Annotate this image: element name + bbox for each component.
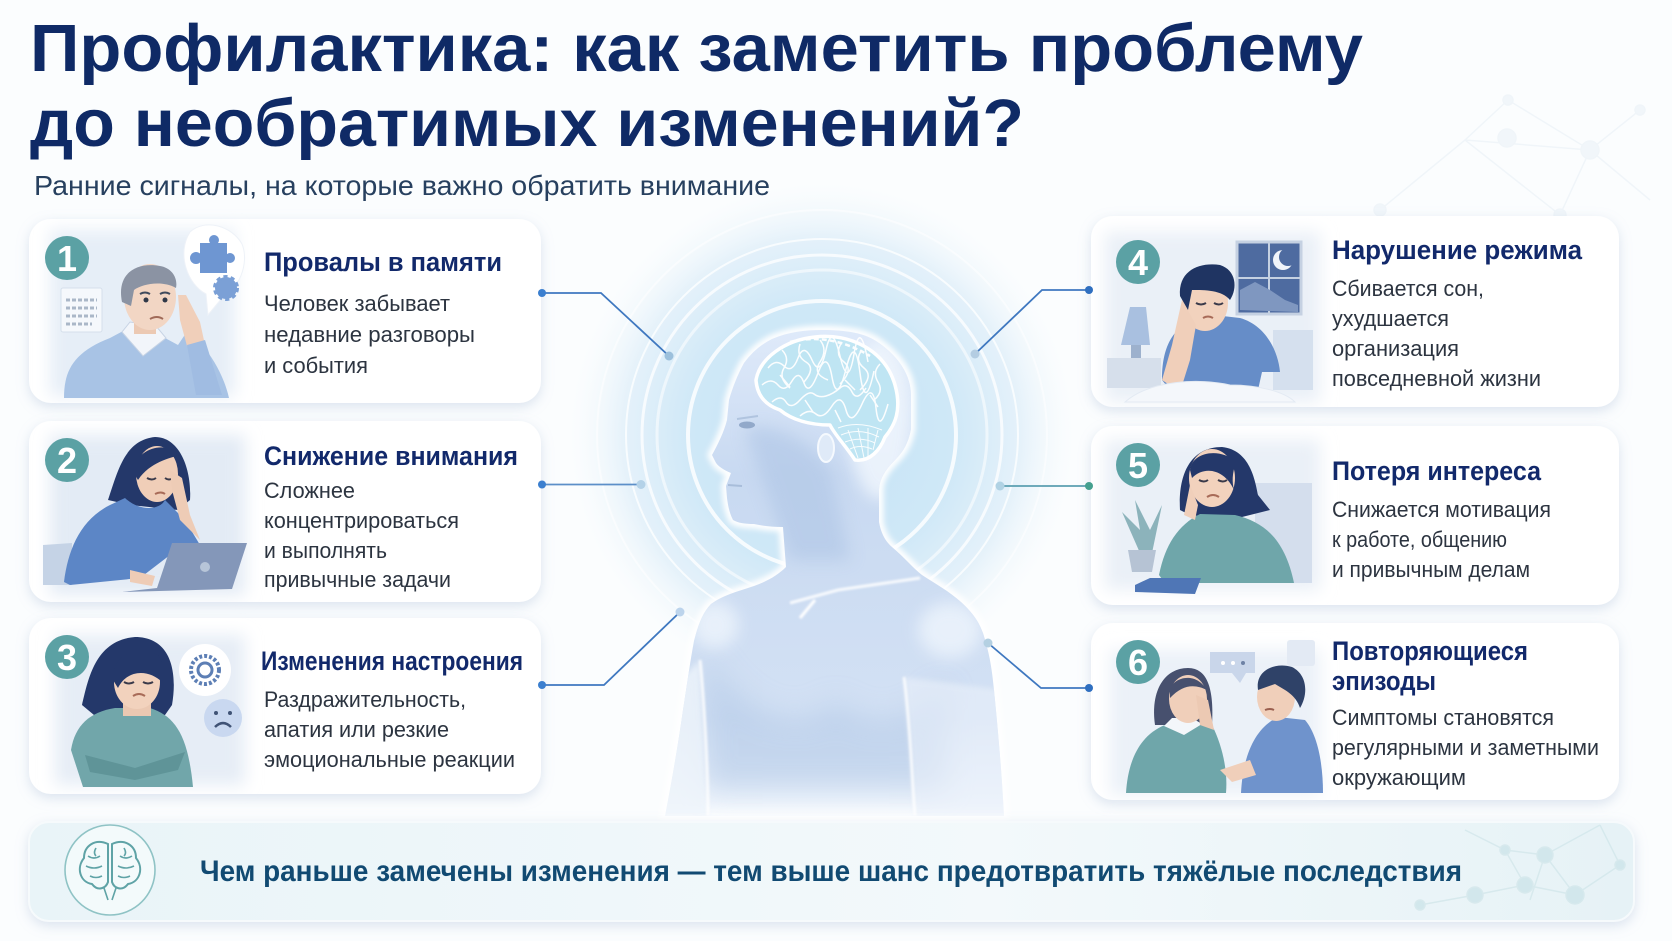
- number badge 4: [1116, 240, 1160, 284]
- title: Профилактика: как заметить проблему: [30, 11, 1363, 86]
- heading: Изменения настроения: [261, 646, 523, 676]
- number badge 5: 5: [1128, 445, 1148, 486]
- glow rings: [570, 183, 1074, 687]
- illustration: woman at laptop: [43, 435, 247, 595]
- body text: [264, 478, 459, 592]
- body text: организация: [1332, 336, 1459, 361]
- panel: card 4 routine: [1091, 216, 1619, 407]
- background network pattern: [1374, 95, 1650, 221]
- title: [30, 11, 1363, 161]
- illustration: man touching forehead: [50, 225, 245, 398]
- face details: [728, 416, 834, 486]
- heading: Провалы в памяти: [264, 247, 502, 277]
- body text: окружающим: [1332, 765, 1466, 790]
- number badge 2: 2: [57, 440, 77, 481]
- illustration: two people talking: [1110, 640, 1323, 795]
- heading: [1332, 636, 1528, 696]
- number badge 6: 6: [1128, 642, 1148, 683]
- illustration: woman with plant and book: [1105, 440, 1320, 594]
- number badge 1: 1: [57, 238, 77, 279]
- illustration: tired man in bed: [1105, 232, 1320, 402]
- heading: Потеря интереса: [1332, 456, 1542, 486]
- body text: Сбивается сон,: [1332, 276, 1484, 301]
- central figure with brain: [599, 212, 1046, 816]
- body text: ухудшается: [1332, 306, 1449, 331]
- banner network decoration: [1415, 825, 1625, 910]
- body text: и события: [264, 353, 368, 378]
- heading: Нарушение режима: [1332, 235, 1583, 265]
- brain: [756, 336, 898, 460]
- body text: недавние разговоры: [264, 322, 475, 347]
- heading: эпизоды: [1332, 666, 1436, 696]
- body silhouette: [665, 330, 1004, 816]
- panel: card 1 memory lapses: [29, 219, 541, 403]
- panel: card 5 loss of interest: [1091, 426, 1619, 605]
- panel: card 2 attention: [29, 421, 541, 602]
- body text: Снижается мотивация: [1332, 497, 1551, 522]
- body text: повседневной жизни: [1332, 366, 1541, 391]
- connector 4: [970, 286, 1093, 358]
- heading: Снижение внимания: [264, 441, 518, 471]
- body text: и привычным делам: [1332, 557, 1530, 582]
- body text: Человек забывает: [264, 291, 450, 316]
- body text: эмоциональные реакции: [264, 747, 515, 772]
- icon: brain in circle: [65, 825, 155, 915]
- number badge 1: [45, 236, 89, 280]
- number badge 2: [45, 438, 89, 482]
- subtitle: Ранние сигналы, на которые важно обратить внимание: [34, 170, 770, 201]
- body text: [1332, 497, 1551, 582]
- body shading: [660, 340, 1010, 816]
- body text: Раздражительность,: [264, 687, 466, 712]
- body text: [1332, 276, 1541, 391]
- body text: [1332, 705, 1599, 790]
- connector 6: [984, 638, 1093, 692]
- connector 1: [538, 289, 674, 360]
- body text: Сложнее: [264, 478, 355, 503]
- title: до необратимых изменений?: [30, 86, 1024, 161]
- body text: регулярными и заметными: [1332, 735, 1599, 760]
- body text: Симптомы становятся: [1332, 705, 1554, 730]
- body glow outline: [665, 330, 1004, 816]
- heading: Повторяющиеся: [1332, 636, 1528, 666]
- number badge 4: 4: [1128, 242, 1148, 283]
- body text: [264, 687, 515, 772]
- body text: привычные задачи: [264, 567, 451, 592]
- bottom banner: [29, 822, 1634, 921]
- body text: к работе, общению: [1332, 527, 1507, 552]
- connector 2: [538, 480, 646, 489]
- number badge 5: [1116, 443, 1160, 487]
- body text: и выполнять: [264, 538, 387, 563]
- panel: card 3 mood: [29, 618, 541, 794]
- body text: [264, 291, 475, 378]
- panel: card 6 recurring episodes: [1091, 623, 1619, 800]
- connector 3: [538, 608, 684, 689]
- illustration: woman with crossed arms: [55, 635, 245, 787]
- body text: апатия или резкие: [264, 717, 449, 742]
- number badge 6: [1116, 640, 1160, 684]
- number badge 3: [45, 635, 89, 679]
- body text: концентрироваться: [264, 508, 459, 533]
- connector 5: [996, 482, 1093, 490]
- banner text: Чем раньше замечены изменения — тем выше шанс предотвратить тяжёлые последствия: [200, 855, 1462, 888]
- number badge 3: 3: [57, 637, 77, 678]
